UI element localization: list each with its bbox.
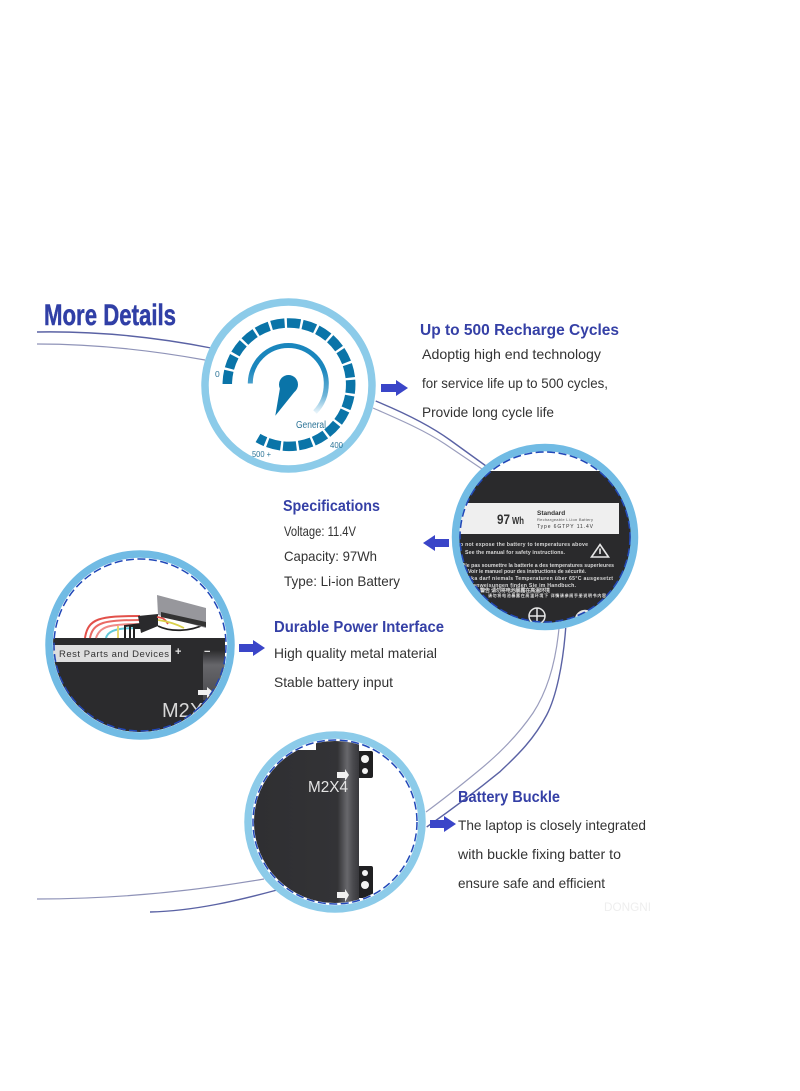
- gauge labels: 400: [330, 440, 343, 450]
- warning text: See the manual for safety instructions.: [465, 550, 566, 556]
- heading: battery buckle: Battery Buckle: [458, 789, 560, 806]
- arrow: buckle to buckle text: [430, 816, 456, 832]
- text block: power interface: [274, 619, 444, 690]
- warning text: [460, 542, 614, 598]
- panel: buckle circle: M2X4: [308, 779, 348, 796]
- body: recharge cycles: for service life up to 500 cycles,: [422, 375, 608, 391]
- watermark: DONGNI: [604, 900, 651, 914]
- body: recharge cycles: Provide long cycle life: [422, 404, 554, 420]
- body: specifications: [284, 523, 400, 589]
- panel: power connector circle: M2X: [162, 700, 203, 722]
- gauge labels: 0: [215, 369, 220, 379]
- body: power interface: [274, 645, 437, 690]
- body: specifications: Type: Li-ion Battery: [284, 573, 400, 589]
- connector: [157, 595, 206, 628]
- screw arrow: [198, 687, 213, 698]
- panel: buckle circle: [240, 735, 422, 909]
- connecting curved lines: [37, 332, 566, 912]
- screw arrows: [337, 769, 349, 781]
- wires: [85, 616, 144, 638]
- body: specifications: Capacity: 97Wh: [284, 548, 377, 564]
- warning text: Ne pas soumettre la batterie a des temperatures superieures: [463, 563, 614, 569]
- label strip: [450, 503, 619, 534]
- panel: gauge circle: [205, 302, 372, 469]
- buckle tabs: [359, 751, 373, 898]
- gauge segmented arc: [227, 323, 351, 446]
- panel: battery label circle: Wh: [512, 516, 524, 527]
- body: specifications: Voltage: 11.4V: [284, 523, 357, 539]
- heading: specifications: Specifications: [283, 498, 380, 515]
- arrow: gauge to recharge text: [381, 380, 408, 396]
- heading: recharge cycles: Up to 500 Recharge Cycles: [420, 322, 619, 339]
- body: power interface: Stable battery input: [274, 674, 393, 690]
- panel: power connector circle: Rest Parts and Devices: [59, 649, 169, 660]
- battery body: [50, 638, 225, 740]
- body: battery buckle: [457, 817, 646, 891]
- battery body: [254, 741, 359, 903]
- panel: power connector circle: −: [204, 646, 210, 658]
- gauge labels: 500 +: [252, 449, 271, 459]
- warning text: kka darf niemals Temperaturen über 65°C ausgesetzt: [468, 576, 613, 582]
- arrow: battery label to specifications: [423, 535, 449, 551]
- gauge labels: General: [296, 420, 326, 431]
- polarity marks: +: [175, 646, 181, 658]
- panel: battery label circle: [450, 448, 640, 641]
- body: battery buckle: with buckle fixing batter to: [457, 846, 621, 862]
- gauge labels: [215, 369, 343, 459]
- panel: battery label circle: Standard: [537, 510, 565, 517]
- body: power interface: High quality metal material: [274, 645, 437, 661]
- panel: battery label circle: 97: [497, 511, 510, 527]
- text block: recharge cycles: [420, 322, 619, 420]
- warning text: o not expose the battery to temperatures above: [460, 542, 588, 548]
- warning text: tsanweisungen finden Sie im Handbuch.: [468, 583, 577, 589]
- gauge inner arc: [250, 346, 326, 412]
- panel: battery label circle: Rechargeable Li-ion Battery: [537, 517, 593, 522]
- panel: power connector circle: [48, 553, 232, 740]
- body: battery buckle: ensure safe and efficient: [458, 875, 605, 891]
- body: recharge cycles: [422, 346, 608, 420]
- title: More Details: [44, 299, 176, 332]
- heading: power interface: Durable Power Interface: [274, 619, 444, 636]
- infographic canvas: [37, 298, 650, 913]
- body: battery buckle: The laptop is closely integrated: [458, 817, 646, 833]
- gauge needle: [275, 375, 298, 416]
- label strip: [50, 645, 171, 662]
- warning text: 警告 请勿将电池暴露在高温环境: [480, 586, 551, 594]
- panel: battery label circle: Type 6GTPY 11.4V: [537, 524, 594, 530]
- body: recharge cycles: Adoptig high end technology: [422, 346, 601, 362]
- warning text: 请勿将电池暴露在高温环境下 详情请参阅手册说明书内容: [488, 592, 606, 598]
- text block: specifications: [283, 498, 400, 589]
- warning triangle: [592, 544, 608, 557]
- warning text: Voir le manuel pour des instructions de sécurité.: [468, 569, 587, 575]
- certification marks: [528, 607, 589, 623]
- text block: battery buckle: [457, 789, 646, 891]
- arrow: connector to power interface text: [239, 640, 265, 656]
